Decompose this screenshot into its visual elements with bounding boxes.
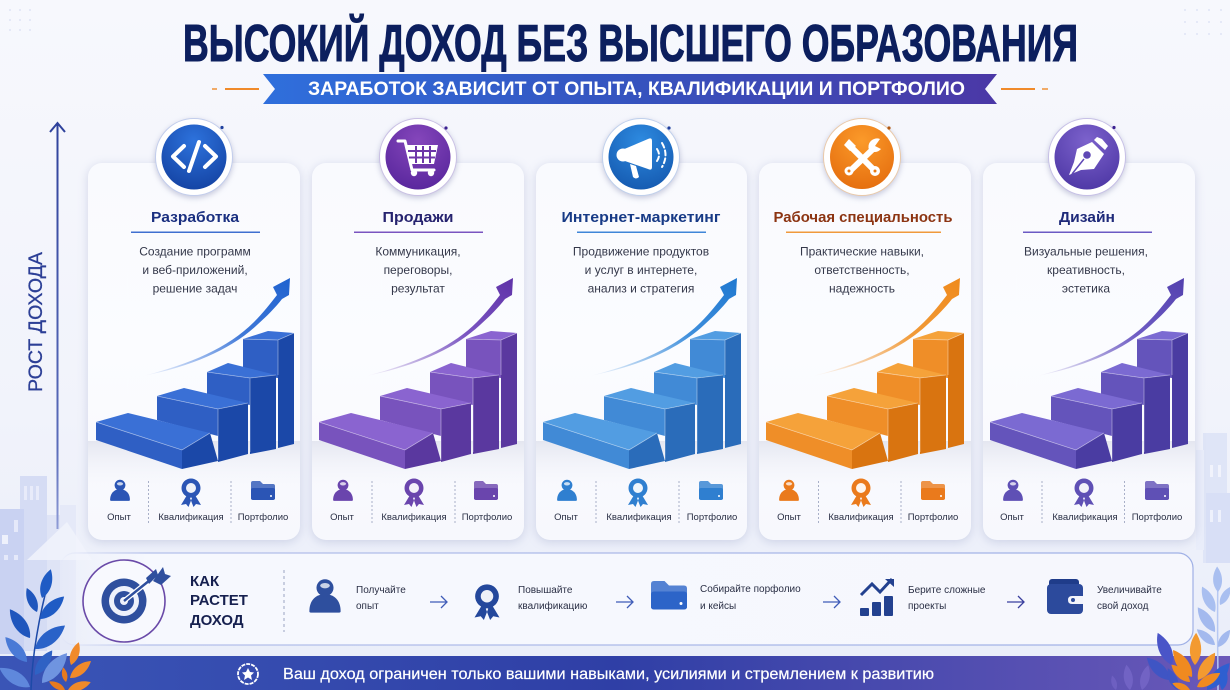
icon row: Опыт — [330, 512, 355, 523]
description: надежность — [829, 282, 895, 296]
step 2: квалификацию — [518, 600, 588, 612]
icon row: Опыт — [777, 512, 802, 523]
stairs — [319, 331, 517, 469]
subtitle ribbon — [263, 74, 997, 104]
description: решение задач — [153, 282, 237, 296]
description — [800, 244, 924, 296]
icon row: Опыт — [554, 512, 579, 523]
icon: cart — [380, 118, 456, 196]
stairs — [990, 331, 1188, 469]
description: эстетика — [1062, 282, 1110, 296]
floor shadow — [983, 441, 1195, 491]
floor shadow — [759, 441, 971, 491]
growth arrow — [590, 278, 737, 376]
step 1: опыт — [356, 601, 379, 612]
description: Создание программ — [139, 244, 251, 258]
step 3: и кейсы — [700, 601, 736, 612]
icon row: Квалификация — [828, 512, 894, 523]
heading: Рабочая специальность — [774, 209, 952, 226]
icon row: Портфолио — [687, 512, 737, 523]
icon row — [1000, 478, 1182, 525]
step 4: Берите сложные — [908, 585, 986, 596]
icon row: Портфолио — [238, 512, 288, 523]
step 5: свой доход — [1097, 601, 1149, 612]
panel: Дизайн — [983, 118, 1195, 540]
label: КАК — [190, 573, 220, 590]
axis label: РОСТ ДОХОДА — [26, 252, 47, 392]
icon row: Опыт — [1000, 512, 1025, 523]
icon row: Квалификация — [381, 512, 447, 523]
label: ДОХОД — [190, 612, 244, 629]
heading: Разработка — [151, 209, 240, 226]
stairs — [766, 331, 964, 469]
step 5 — [1047, 579, 1162, 614]
label: РАСТЕТ — [190, 592, 248, 609]
stairs — [96, 331, 294, 469]
description: и веб-приложений, — [142, 263, 248, 277]
icon row — [554, 478, 737, 525]
growth arrow — [143, 278, 290, 376]
description: Коммуникация, — [375, 244, 461, 258]
skyline left — [0, 476, 92, 654]
panel: Разработка — [88, 118, 300, 540]
step 1 — [309, 579, 406, 613]
description: Визуальные решения, — [1024, 244, 1148, 258]
growth arrow — [813, 278, 960, 376]
arrow — [1007, 596, 1024, 608]
icon row: Портфолио — [1132, 512, 1182, 523]
step 2 — [474, 584, 588, 620]
stairs — [543, 331, 741, 469]
heading: Интернет-маркетинг — [562, 209, 720, 226]
plant right — [1110, 566, 1230, 690]
icon: code — [156, 118, 232, 196]
description: анализ и стратегия — [588, 282, 694, 296]
arrow — [616, 596, 633, 608]
description: ответственность, — [814, 263, 910, 277]
description: Практические навыки, — [800, 244, 924, 258]
step 4 — [860, 579, 986, 616]
icon row: Квалификация — [606, 512, 672, 523]
description — [573, 244, 709, 296]
icon: star badge — [238, 664, 258, 684]
description — [375, 244, 461, 296]
icon row — [330, 478, 512, 525]
icon: megaphone — [602, 118, 680, 196]
icon: tools — [824, 118, 900, 196]
icon: pen nib — [1048, 118, 1126, 196]
step 3: Собирайте порфолио — [700, 583, 801, 595]
step 3 — [651, 581, 801, 612]
panel: Рабочая специальность — [759, 118, 971, 540]
ribbon dashes — [212, 88, 1048, 90]
growth arrow — [366, 278, 513, 376]
step 5: Увеличивайте — [1097, 585, 1162, 596]
description — [1024, 244, 1148, 296]
plant left — [0, 568, 94, 690]
description: и услуг в интернете, — [585, 263, 697, 277]
dots decoration top — [9, 9, 1222, 35]
description: креативность, — [1047, 263, 1125, 277]
panel: Продажи — [312, 118, 524, 540]
icon row: Портфолио — [908, 512, 958, 523]
description: Продвижение продуктов — [573, 244, 709, 258]
step 2: Повышайте — [518, 585, 573, 596]
footer band: Ваш доход ограничен только вашими навыками, усилиями и стремлением к развитию — [283, 666, 934, 683]
icon: target — [83, 560, 171, 642]
icon row: Портфолио — [462, 512, 512, 523]
step 1: Получайте — [356, 585, 406, 596]
growth arrow — [1037, 278, 1184, 376]
description: переговоры, — [384, 263, 452, 277]
heading: Дизайн — [1059, 209, 1115, 226]
icon row: Квалификация — [158, 512, 224, 523]
footer band — [0, 656, 1230, 690]
floor shadow — [536, 441, 747, 491]
step 4: проекты — [908, 601, 946, 612]
description — [139, 244, 251, 296]
icon row: Квалификация — [1052, 512, 1118, 523]
floor shadow — [88, 441, 300, 491]
icon row: Опыт — [107, 512, 132, 523]
subtitle ribbon: ЗАРАБОТОК ЗАВИСИТ ОТ ОПЫТА, КВАЛИФИКАЦИИ И ПОРТФОЛИО — [308, 79, 965, 100]
panel: Интернет-маркетинг — [536, 118, 747, 540]
label — [190, 573, 248, 629]
arrow — [823, 596, 840, 608]
description: результат — [391, 282, 445, 296]
arrow — [430, 596, 447, 608]
icon row — [107, 478, 288, 525]
floor shadow — [312, 441, 524, 491]
skyline right — [1196, 433, 1230, 563]
icon row — [777, 478, 958, 525]
panel: how income grows — [60, 553, 1193, 645]
heading: Продажи — [382, 209, 454, 226]
axis arrow — [50, 123, 65, 529]
